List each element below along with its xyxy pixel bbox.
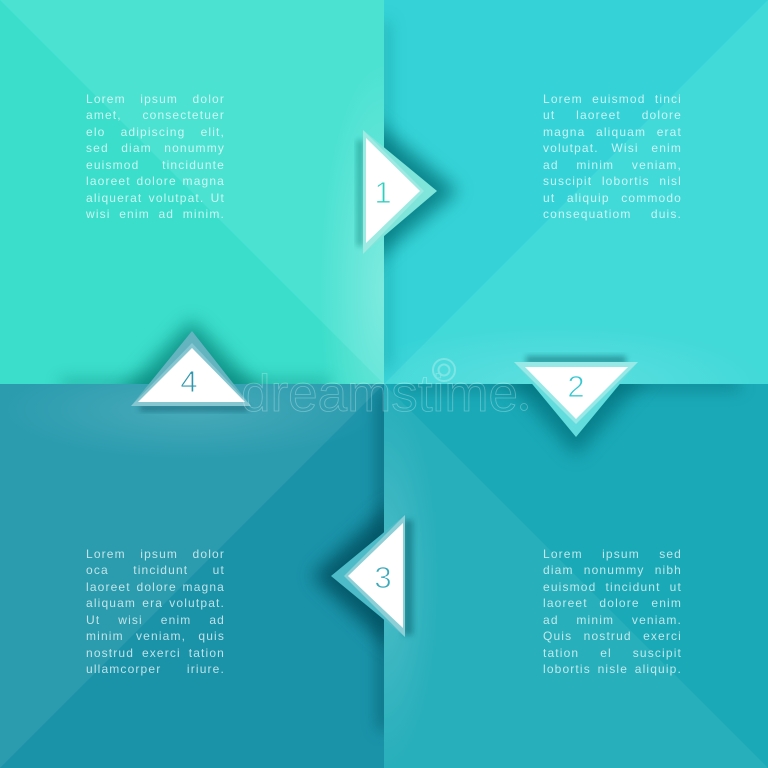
text block: top right: ut laoreet dolore bbox=[543, 108, 682, 122]
arrow 1 bbox=[357, 130, 437, 254]
text block: bottom left: oca tincidunt ut bbox=[86, 563, 225, 577]
text block: bottom right: lobortis nisle aliquip. bbox=[543, 662, 682, 676]
text block: bottom left bbox=[86, 547, 225, 676]
text block: top left bbox=[86, 92, 225, 221]
text block: bottom left: nostrud exerci tation bbox=[86, 646, 225, 660]
text block: top right: magna aliquam erat bbox=[543, 125, 682, 139]
panel: top right quadrant bbox=[384, 0, 768, 384]
text block: top left: amet, consectetuer bbox=[86, 108, 225, 122]
text block: bottom right: euismod tincidunt ut bbox=[543, 580, 682, 594]
text block: top right: ut aliquip commodo bbox=[543, 191, 682, 205]
text block: bottom left: Ut wisi enim ad bbox=[86, 613, 225, 627]
text block: bottom right: Quis nostrud exerci bbox=[543, 629, 682, 643]
text block: bottom right: laoreet dolore enim bbox=[543, 596, 682, 610]
arrow 4 bbox=[131, 331, 251, 406]
text block: bottom left: ullamcorper iriure. bbox=[86, 662, 225, 676]
text block: top left: laoreet dolore magna bbox=[86, 174, 225, 188]
text block: top right: Lorem euismod tinci bbox=[543, 92, 682, 106]
number 2: 2 bbox=[567, 369, 585, 404]
text block: top right: ad minim veniam, bbox=[543, 158, 682, 172]
text block: bottom right: Lorem ipsum sed bbox=[543, 547, 682, 561]
text block: bottom left: Lorem ipsum dolor bbox=[86, 547, 225, 561]
text block: top right: consequatiom duis. bbox=[543, 207, 682, 221]
text block: top left: Lorem ipsum dolor bbox=[86, 92, 225, 106]
text block: bottom left: laoreet dolore magna bbox=[86, 580, 225, 594]
arrow 2 bbox=[514, 362, 638, 437]
text block: top left: aliquerat volutpat. Ut bbox=[86, 191, 225, 205]
text block: bottom left: minim veniam, quis bbox=[86, 629, 225, 643]
text block: top left: sed diam nonummy bbox=[86, 141, 225, 155]
text block: bottom right: diam nonummy nibh bbox=[543, 563, 682, 577]
panel: bottom right quadrant bbox=[384, 384, 756, 750]
text block: bottom left: aliquam era volutpat. bbox=[86, 596, 225, 610]
text block: top right: volutpat. Wisi enim bbox=[543, 141, 682, 155]
text block: top left: euismod tincidunte bbox=[86, 158, 225, 172]
watermark: dreamstime bbox=[241, 365, 518, 423]
number 4: 4 bbox=[180, 364, 198, 399]
panel: bottom left quadrant bbox=[0, 360, 395, 768]
text block: bottom right bbox=[543, 547, 682, 676]
number 1: 1 bbox=[374, 175, 392, 210]
number 3: 3 bbox=[374, 560, 392, 595]
text block: bottom right: tation el suscipit bbox=[543, 646, 682, 660]
text block: top left: wisi enim ad minim. bbox=[86, 207, 225, 221]
text block: top left: elo adipiscing elit, bbox=[86, 125, 225, 139]
text block: top right: suscipit lobortis nisl bbox=[543, 174, 682, 188]
panel: top left quadrant bbox=[0, 0, 384, 384]
arrow 3 bbox=[331, 515, 405, 637]
text block: bottom right: ad minim veniam. bbox=[543, 613, 682, 627]
text block: top right bbox=[543, 92, 682, 221]
